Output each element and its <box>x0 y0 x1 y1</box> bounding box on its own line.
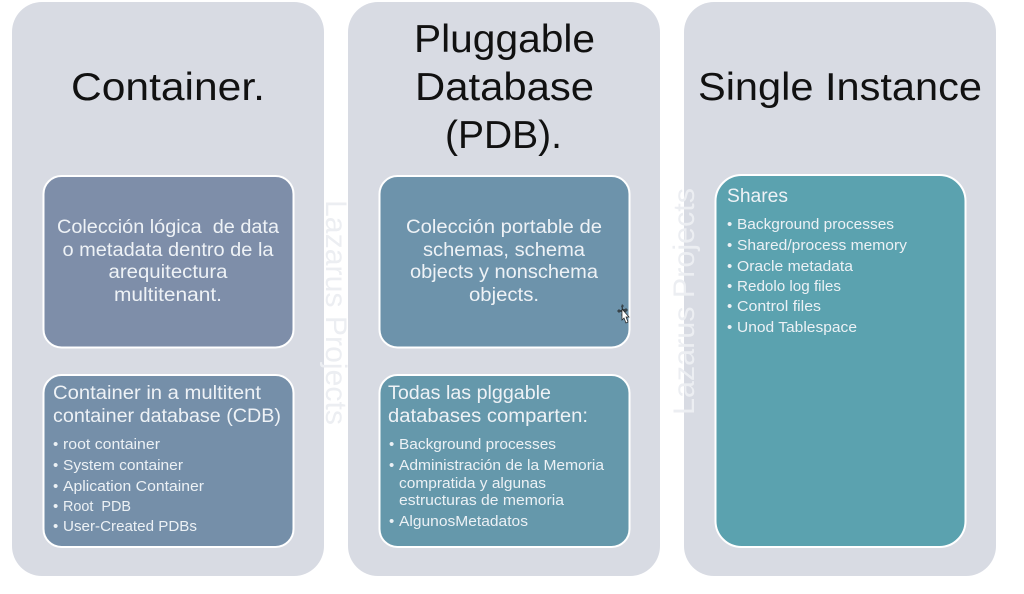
panel: container <box>12 2 324 576</box>
card: pdb definition: objects. <box>469 285 539 306</box>
title: single instance: Single Instance <box>698 66 982 109</box>
card: pdb shared items: Todas las plggable <box>388 383 551 404</box>
card: pdb shared items <box>380 375 630 547</box>
card: pdb definition: Colección portable de <box>406 217 602 238</box>
card: pdb definition: schemas, schema <box>423 240 585 261</box>
card: shares list: Unod Tablespace <box>737 319 857 336</box>
card: pdb shared items: databases comparten: <box>388 406 588 427</box>
card: container types: • <box>53 518 58 535</box>
card: container definition: Colección lógica de data <box>57 217 279 238</box>
watermark: right: Lazarus Projects <box>668 188 701 415</box>
card: container types: Aplication Container <box>63 478 204 495</box>
card: pdb definition: objects y nonschema <box>410 262 598 283</box>
card: shares list: Oracle metadata <box>737 258 854 275</box>
card: shares list: Background processes <box>737 216 894 233</box>
card: shares list: Shares <box>727 186 788 207</box>
card: shares list: • <box>727 237 732 254</box>
card: container types: • <box>53 498 58 515</box>
card: container definition: arequitectura <box>108 262 228 283</box>
panel: single instance <box>684 2 996 576</box>
card: container definition: o metadata dentro de la <box>62 240 274 261</box>
card: shares list: Shared/process memory <box>737 237 908 254</box>
card: container definition: multitenant. <box>114 285 222 306</box>
watermark: left: Lazarus Projects <box>319 200 352 425</box>
card: pdb definition <box>380 176 630 348</box>
card: pdb shared items: estructuras de memoria <box>399 492 565 509</box>
card: container types <box>44 375 294 547</box>
card: container types: Root PDB <box>63 498 131 515</box>
card: container types: User-Created PDBs <box>63 518 197 535</box>
card: shares list: • <box>727 298 732 315</box>
card: shares list: Redolo log files <box>737 278 841 295</box>
icon: mouse cursor <box>617 304 629 323</box>
card: container types: • <box>53 436 58 453</box>
card: shares list: • <box>727 216 732 233</box>
card: container types: • <box>53 478 58 495</box>
title: container: Container. <box>71 66 265 109</box>
card: shares list: • <box>727 258 732 275</box>
card: container types: System container <box>63 457 183 474</box>
card: container types: • <box>53 457 58 474</box>
card: pdb shared items: • <box>389 436 394 453</box>
card: container types: container database (CDB) <box>53 406 281 427</box>
card: pdb shared items: Administración de la Memoria <box>399 457 605 474</box>
panel: pluggable database <box>348 2 660 576</box>
card: shares list: • <box>727 278 732 295</box>
card: pdb shared items: • <box>389 457 394 474</box>
card: container types: Container in a multitent <box>53 383 262 404</box>
card: shares list <box>716 175 966 547</box>
title: pluggable database: Database <box>415 66 594 109</box>
title: pluggable database: Pluggable <box>414 18 595 61</box>
title: pluggable database <box>414 18 595 157</box>
card: container definition <box>44 176 294 348</box>
card: container types: root container <box>63 436 160 453</box>
card: pdb shared items: AlgunosMetadatos <box>399 513 528 530</box>
card: shares list: • <box>727 319 732 336</box>
card: shares list: Control files <box>737 298 821 315</box>
title: pluggable database: (PDB). <box>445 114 562 157</box>
card: pdb shared items: compratida y algunas <box>399 475 546 492</box>
card: pdb shared items: Background processes <box>399 436 556 453</box>
card: pdb shared items: • <box>389 513 394 530</box>
